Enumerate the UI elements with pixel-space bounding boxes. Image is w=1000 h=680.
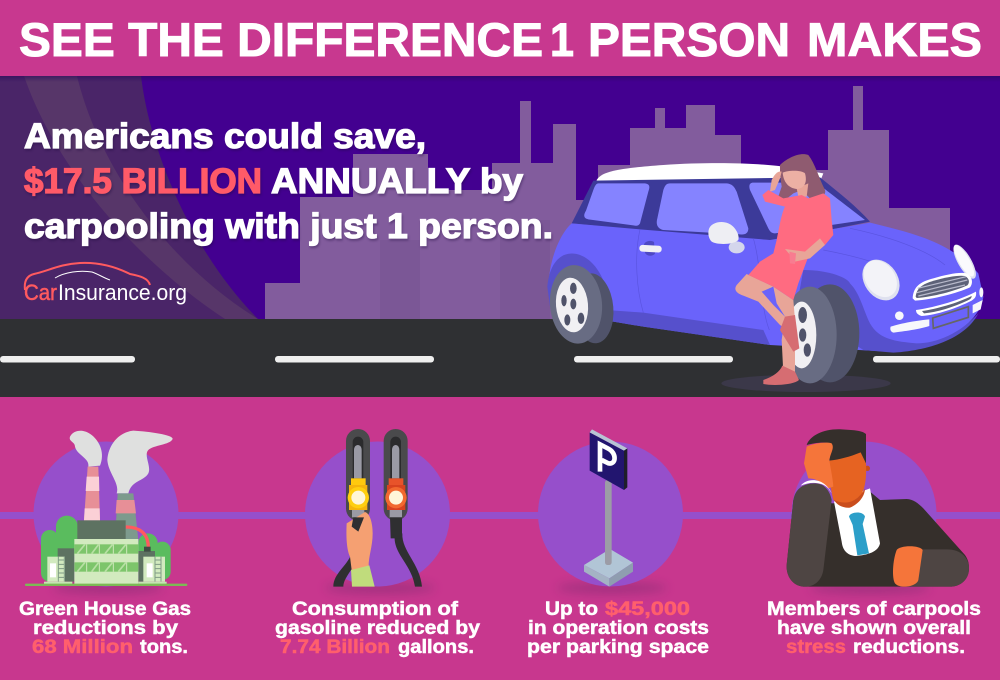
headlights	[855, 252, 907, 308]
caption: per parking space	[527, 636, 709, 658]
car front details	[855, 242, 983, 333]
icon: factory	[25, 431, 187, 586]
caption: tons.	[140, 636, 188, 658]
icon: parking sign	[584, 429, 633, 587]
hero headline: carpooling with just 1 person.	[24, 207, 553, 246]
caption: reductions by	[33, 617, 178, 639]
title: 1	[550, 13, 574, 66]
caption	[527, 598, 709, 658]
caption	[19, 598, 191, 658]
door handle and mirror	[644, 241, 655, 256]
caption: reductions.	[853, 636, 965, 658]
hero headline	[24, 117, 553, 246]
title: PERSON	[588, 13, 790, 66]
icon: fuel nozzles	[333, 429, 422, 587]
car body	[547, 163, 983, 353]
caption: in operation costs	[528, 617, 709, 639]
caption: Consumption of	[292, 598, 459, 620]
caption: 68 Million	[32, 636, 133, 658]
CarInsurance.org logo	[24, 263, 187, 305]
icon: stressed man	[787, 429, 969, 587]
car and woman illustration	[547, 154, 983, 392]
CarInsurance.org logo: Car	[24, 280, 57, 305]
windows	[584, 183, 649, 226]
caption: gallons.	[398, 636, 474, 658]
panel: stress	[767, 429, 981, 658]
panel: green house gas	[19, 431, 191, 658]
caption: $45,000	[605, 598, 690, 620]
header banner	[0, 0, 1000, 76]
caption	[767, 598, 981, 658]
road	[0, 319, 1000, 397]
ground shadow	[721, 375, 891, 392]
caption: gasoline reduced by	[275, 617, 480, 639]
caption: Members of carpools	[767, 598, 981, 620]
panel: gasoline	[275, 429, 480, 658]
city skyline	[265, 86, 1000, 319]
hero headline: $17.5 BILLION	[24, 162, 262, 201]
panel: parking	[527, 429, 709, 658]
caption: have shown overall	[777, 617, 971, 639]
hero scene background	[0, 76, 1000, 319]
CarInsurance.org logo: Insurance.org	[58, 280, 187, 305]
caption: Green House Gas	[19, 598, 191, 620]
connector line	[0, 512, 1000, 519]
woman	[735, 154, 833, 385]
grille	[913, 273, 972, 301]
caption: 7.74 Billion	[280, 636, 390, 658]
title: SEE THE DIFFERENCE	[19, 13, 543, 66]
caption: stress	[786, 636, 846, 658]
caption: Up to	[545, 598, 598, 620]
hero headline: ANNUALLY by	[271, 162, 524, 201]
hero headline: Americans could save,	[24, 117, 426, 156]
title: MAKES	[807, 13, 982, 66]
caption	[275, 598, 480, 658]
rear wheel	[547, 263, 616, 346]
bumper, lights and plate	[916, 292, 976, 316]
title	[19, 13, 982, 66]
front wheel	[783, 284, 859, 383]
